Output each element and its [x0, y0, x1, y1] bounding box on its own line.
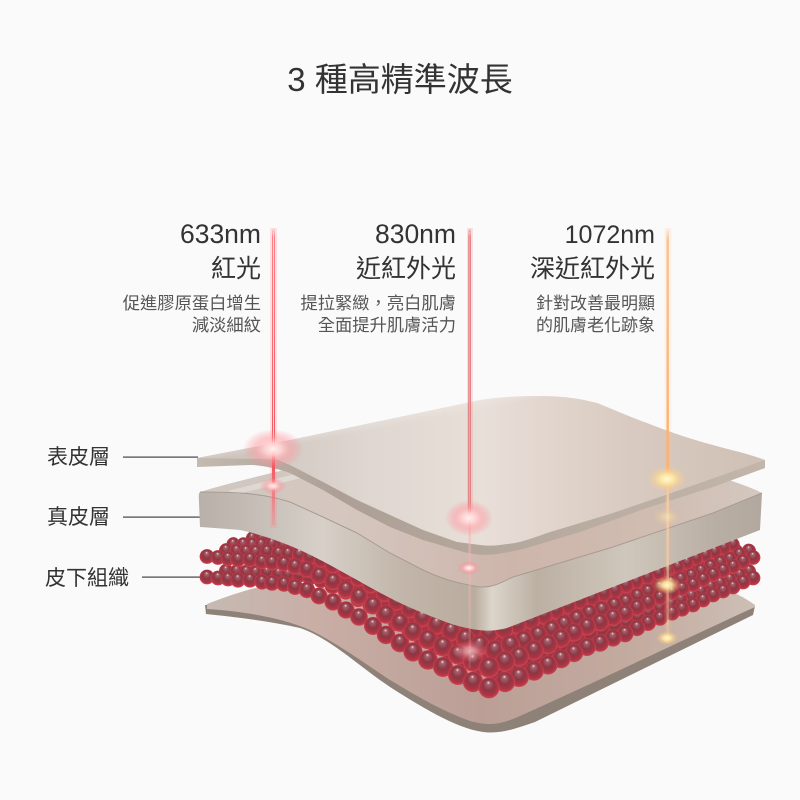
text block: 633nm red light [123, 219, 261, 335]
text block: 830nm near infrared: 830nm [375, 219, 456, 249]
epidermis side [197, 458, 765, 555]
text block: 633nm red light: 633nm [180, 219, 261, 249]
text block: 1072nm deep near infrared: 的肌膚老化跡象 [536, 316, 655, 335]
dermis front side [199, 492, 762, 631]
beam: 830nm red [445, 228, 493, 668]
dermis top highlight [228, 474, 305, 494]
beam: 633nm red [243, 228, 303, 528]
layer: dermis [199, 466, 762, 631]
label: dermis: 真皮層 [47, 506, 110, 529]
label: epidermis: 表皮層 [47, 446, 110, 469]
text block: 1072nm deep near infrared [530, 221, 655, 335]
text block: 633nm red light: 減淡細紋 [192, 315, 261, 335]
text block: 1072nm deep near infrared: 針對改善最明顯 [536, 294, 655, 313]
epidermis top face [197, 396, 765, 546]
title: 3 種高精準波長 [287, 61, 513, 98]
bead sheet: upper strand [200, 479, 760, 678]
text block: 1072nm deep near infrared: 1072nm [565, 221, 655, 249]
beam: 1072nm orange [647, 228, 687, 645]
text block: 1072nm deep near infrared: 深近紅外光 [530, 255, 655, 283]
text block: 830nm near infrared: 全面提升肌膚活力 [318, 315, 456, 335]
text block: 633nm red light: 紅光 [211, 255, 261, 283]
epidermis highlight band [197, 396, 585, 470]
text block: 830nm near infrared [300, 219, 456, 335]
text block: 633nm red light: 促進膠原蛋白增生 [123, 293, 261, 313]
layer: epidermis [197, 396, 765, 555]
text block: 830nm near infrared: 近紅外光 [356, 255, 456, 283]
dermis front edge [200, 492, 762, 587]
layer: subcutaneous base plate [205, 588, 755, 732]
dermis top face [200, 466, 762, 587]
label: subcutaneous tissue: 皮下組織 [45, 567, 129, 590]
text block: 830nm near infrared: 提拉緊緻，亮白肌膚 [300, 293, 456, 313]
bead sheet: lower strand [200, 552, 760, 698]
